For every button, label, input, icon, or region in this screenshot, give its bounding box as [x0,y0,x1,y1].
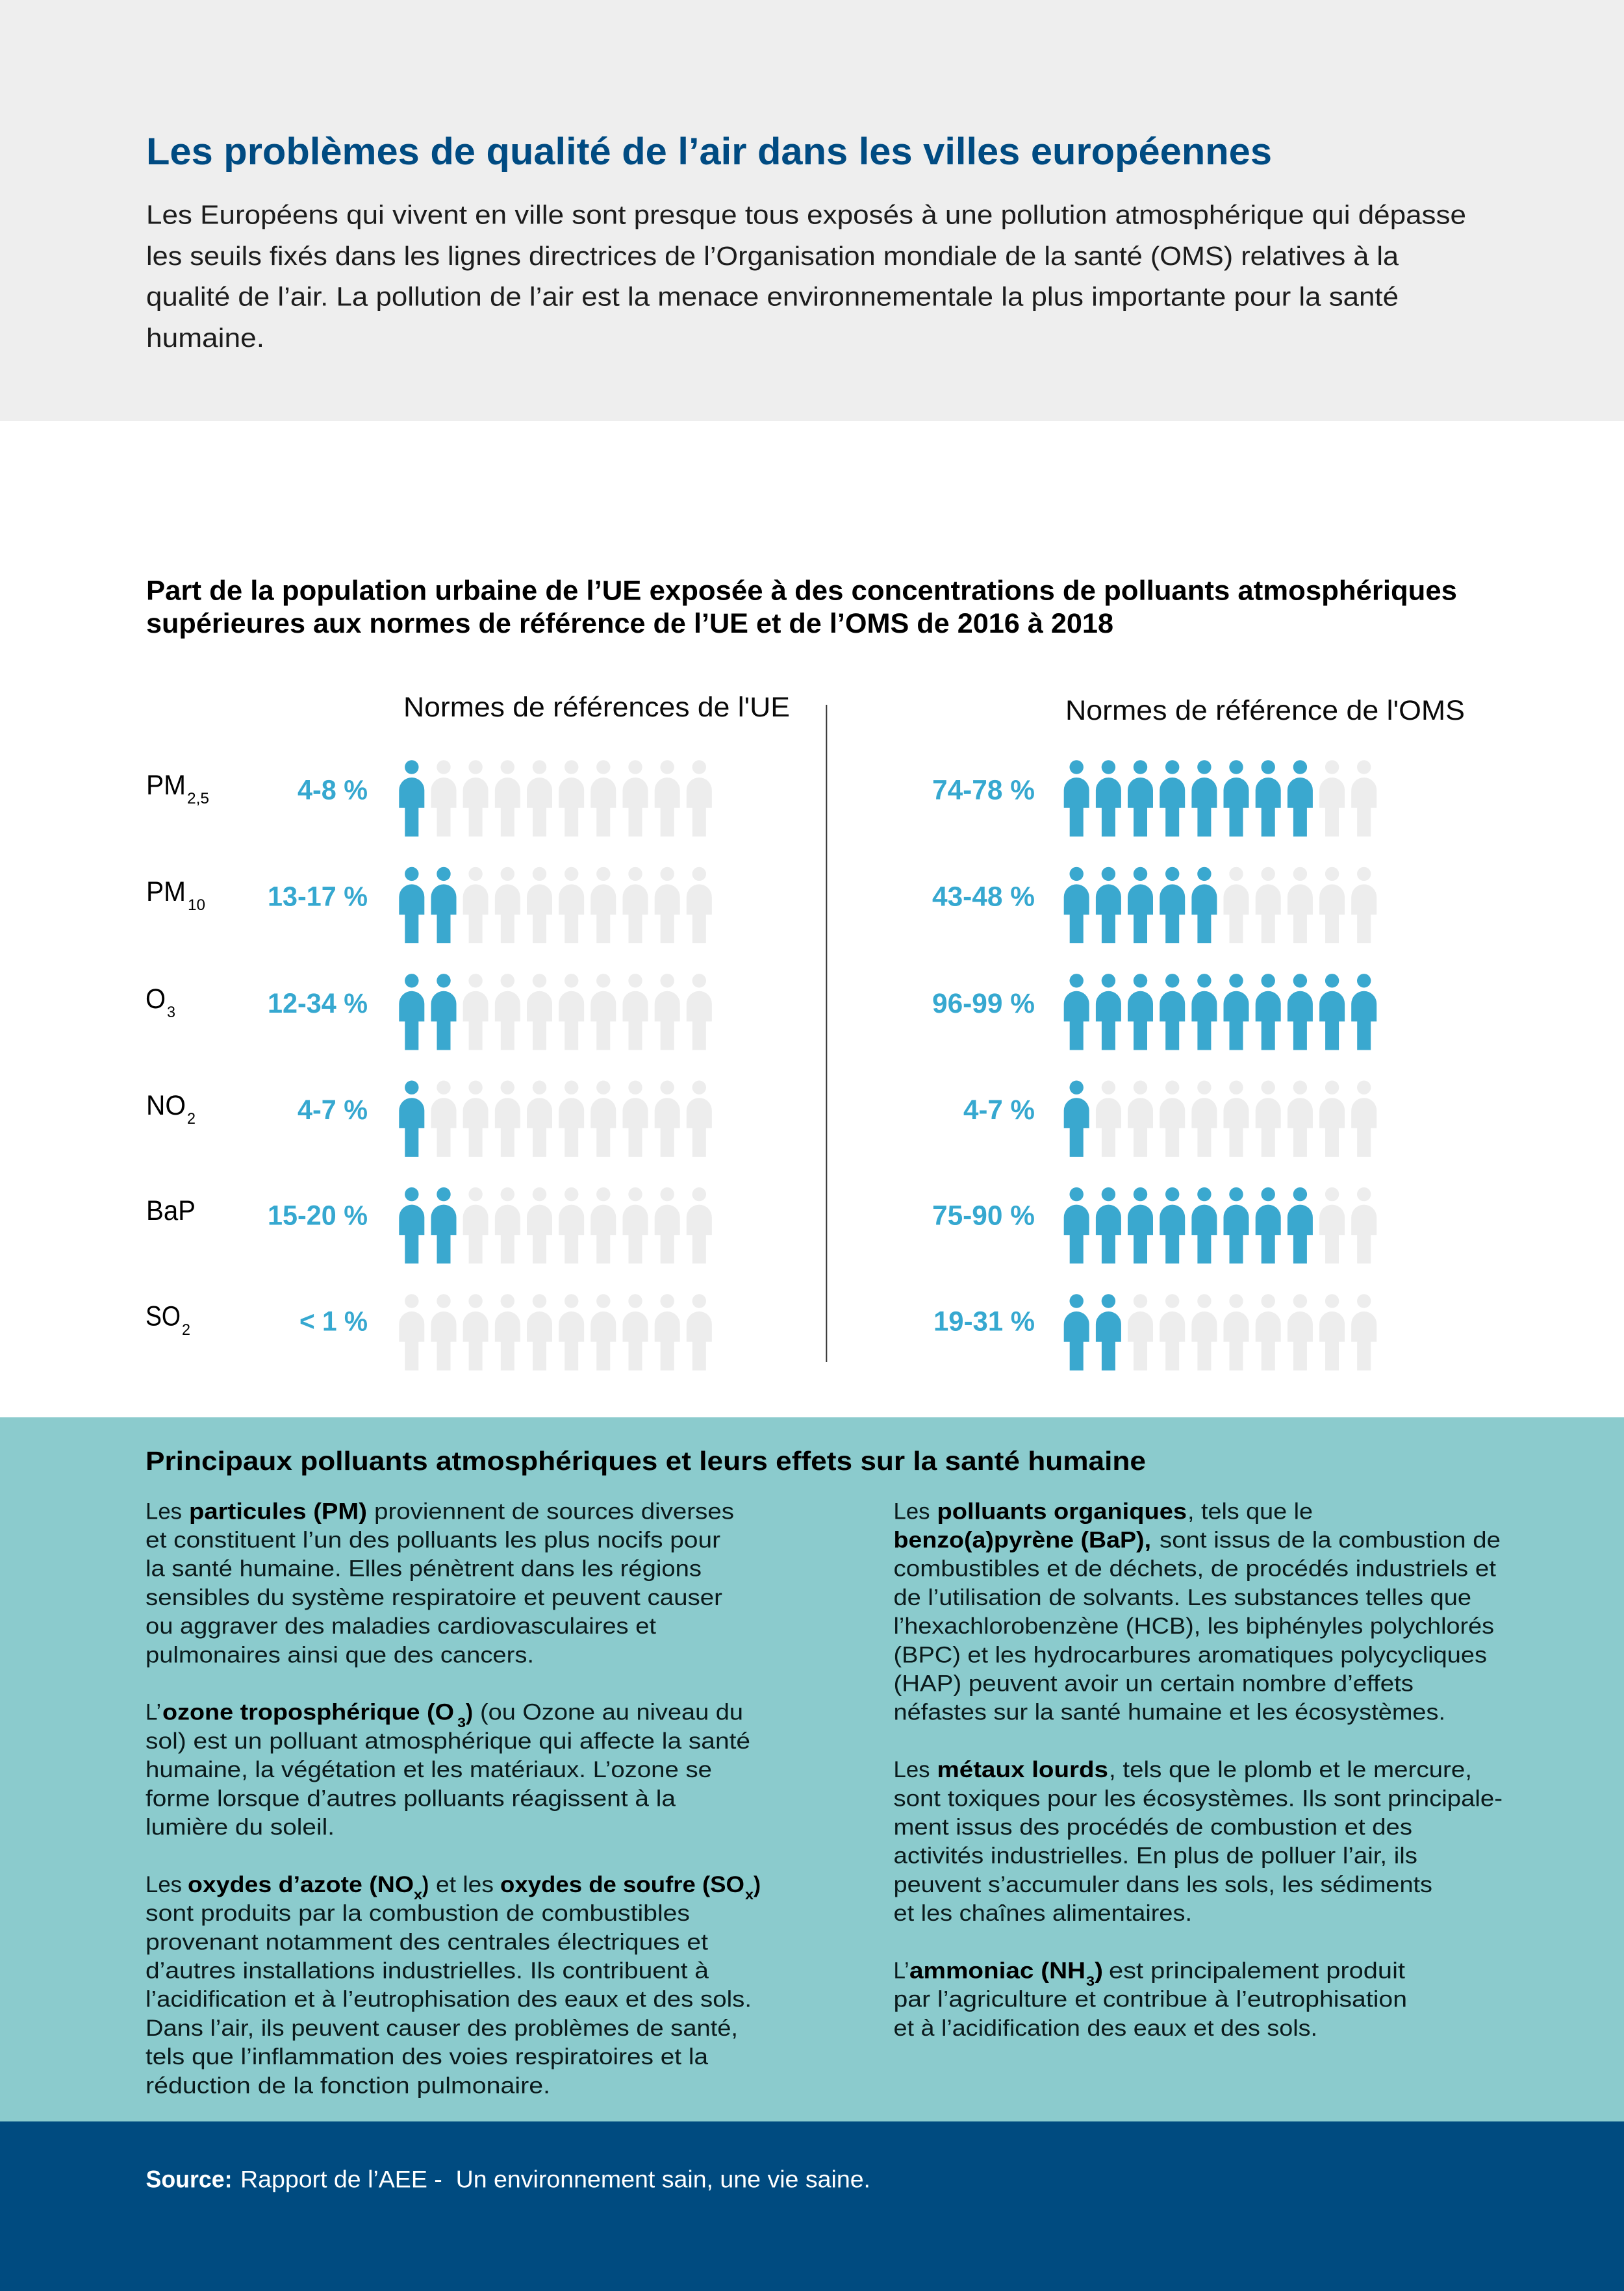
text: organic pollutants: (BPC) et les hydrocarbures aromatiques polycycliques [894,1642,1487,1667]
column heading: WHO: Normes de référence de l'OMS [1065,695,1465,726]
text: organic pollutants: , tels que le [1187,1499,1313,1524]
text: organic pollutants: de l’utilisation de solvants. Les substances telles que [894,1585,1471,1610]
source text: Source: [146,2166,233,2193]
text: nitrogen and sulphur oxides: sont produits par la combustion de combustibles [146,1901,690,1926]
column heading: EU: Normes de références de l'UE [403,692,790,723]
pictogram: WHO O3 [1064,974,1377,1050]
percentages: WHO: 4-7 % [963,1095,1035,1126]
text: ammonia: ) [1095,1958,1103,1984]
percentages: EU: 4-8 % [298,775,368,806]
intro text: humaine. [146,323,264,353]
text: nitrogen and sulphur oxides: oxydes de soufre (SO [500,1872,744,1897]
chart heading: supérieures aux normes de référence de l’UE et de l’OMS de 2016 à 2018 [146,608,1113,639]
percentages: WHO: 75-90 % [932,1200,1035,1232]
text: ozone: sol) est un polluant atmosphérique qui affecte la santé [146,1728,750,1754]
text: nitrogen and sulphur oxides: oxydes d’azote (NO [188,1872,414,1897]
text: heavy metals: métaux lourds [937,1757,1108,1782]
text: heavy metals: activités industrielles. En plus de polluer l’air, ils [894,1843,1417,1869]
text: ammonia: L’ [894,1958,909,1984]
text: ammonia [894,1958,1407,2041]
text: nitrogen and sulphur oxides: provenant notamment des centrales électriques et [146,1929,708,1955]
row labels: pollutants: PM [146,770,186,801]
heading: main pollutants: Principaux polluants atmosphériques et leurs effets sur la santé humaine [146,1446,1146,1476]
text: organic pollutants: sont issus de la combustion de [1160,1528,1501,1552]
text: heavy metals: peuvent s’accumuler dans les sols, les sédiments [894,1872,1432,1897]
intro text: qualité de l’air. La pollution de l’air est la menace environnementale la plus importante pour la santé [146,282,1399,312]
title: Les problèmes de qualité de l’air dans les villes européennes [146,131,1272,173]
text: ozone: 3 [457,1715,466,1730]
text: ammonia: par l’agriculture et contribue à l’eutrophisation [894,1987,1407,2012]
text: organic pollutants: polluants organiques [937,1499,1187,1524]
source text: Rapport de l’AEE - Un environnement sain, une vie saine. [240,2166,870,2193]
row labels: pollutants: 3 [167,1004,175,1021]
percentages: EU: 15-20 % [268,1200,368,1232]
text: nitrogen and sulphur oxides: réduction de la fonction pulmonaire. [146,2073,550,2098]
percentages: EU [268,775,368,1337]
row labels: pollutants: SO [146,1301,181,1332]
text: heavy metals: et les chaînes alimentaires. [894,1901,1192,1926]
pictogram: WHO NO2 [1064,1081,1377,1157]
row labels: pollutants [146,770,209,1339]
row labels: pollutants: O [146,983,166,1015]
text: particulate matter: la santé humaine. Elles pénètrent dans les régions [146,1556,702,1582]
text: ozone: ozone troposphérique (O [162,1700,454,1725]
text: organic pollutants: combustibles et de déchets, de procédés industriels et [894,1556,1496,1582]
row labels: pollutants: NO [146,1090,186,1121]
text: organic pollutants: (HAP) peuvent avoir un certain nombre d’effets [894,1671,1414,1697]
pictogram: WHO PM2,5 [1064,760,1377,837]
text: nitrogen and sulphur oxides: Dans l’air, ils peuvent causer des problèmes de santé, [146,2016,738,2041]
text: nitrogen and sulphur oxides [146,1872,761,2098]
percentages: EU: 12-34 % [268,988,368,1019]
text: particulate matter: sensibles du système respiratoire et peuvent causer [146,1585,722,1610]
pictogram: WHO SO2 [1064,1294,1377,1371]
text: nitrogen and sulphur oxides: Les [146,1872,182,1897]
pictogram: EU BaP [399,1187,712,1263]
text: particulate matter: pulmonaires ainsi que des cancers. [146,1642,534,1667]
text: particulate matter: ou aggraver des maladies cardiovasculaires et [146,1614,656,1639]
panel: source footer [0,2121,1624,2291]
panel: pollutants and health effects [0,1417,1624,2121]
text: ozone [146,1700,750,1840]
text: organic pollutants: néfastes sur la santé humaine et les écosystèmes. [894,1700,1445,1725]
chart heading [146,575,1457,639]
text: ammonia: ammoniac (NH [909,1958,1085,1984]
row labels: pollutants: PM [146,876,186,907]
text: particulate matter: et constituent l’un des polluants les plus nocifs pour [146,1528,720,1552]
row labels: pollutants: 2 [187,1110,196,1128]
text: heavy metals [894,1757,1503,1926]
text: nitrogen and sulphur oxides: ) [422,1872,429,1897]
percentages: WHO: 43-48 % [932,881,1035,913]
text: ammonia: et à l’acidification des eaux et des sols. [894,2016,1317,2041]
text: nitrogen and sulphur oxides: x [414,1888,422,1903]
row labels: pollutants: BaP [146,1195,196,1226]
text: ammonia: 3 [1086,1974,1095,1989]
intro text: Les Européens qui vivent en ville sont presque tous exposés à une pollution atmosphérique qui dépasse [146,200,1466,230]
percentages: WHO: 19-31 % [933,1306,1035,1337]
text: nitrogen and sulphur oxides: x [745,1888,754,1903]
text: ammonia: est principalement produit [1109,1958,1405,1984]
text: nitrogen and sulphur oxides: tels que l’inflammation des voies respiratoires et la [146,2044,709,2069]
text: particulate matter [146,1499,734,1667]
text: ozone: ) [466,1700,473,1725]
text: organic pollutants: benzo(a)pyrène (BaP), [894,1528,1151,1552]
text: nitrogen and sulphur oxides: ) [754,1872,761,1897]
intro text: les seuils fixés dans les lignes directrices de l’Organisation mondiale de la santé (OMS) relatives à la [146,241,1399,271]
text: particulate matter: proviennent de sources diverses [374,1499,734,1524]
percentages: EU: 4-7 % [298,1095,368,1126]
pictogram: EU PM2,5 [399,760,712,837]
row labels: pollutants: 10 [188,896,205,914]
percentages: EU: < 1 % [299,1306,368,1337]
panel: intro [0,0,1624,421]
text: particulate matter: particules (PM) [189,1499,367,1524]
text: heavy metals: sont toxiques pour les écosystèmes. Ils sont principale- [894,1786,1503,1811]
percentages: EU: 13-17 % [268,881,368,913]
text: heavy metals: Les [894,1757,930,1782]
text: nitrogen and sulphur oxides: l’acidification et à l’eutrophisation des eaux et des sols. [146,1987,752,2012]
text: ozone: lumière du soleil. [146,1815,335,1840]
pictogram: EU O3 [399,974,712,1050]
chart heading: Part de la population urbaine de l’UE exposée à des concentrations de polluants atmosphériques [146,575,1457,606]
pictogram: EU SO2 [399,1294,712,1371]
percentages: WHO: 96-99 % [932,988,1035,1019]
pictogram: EU NO2 [399,1081,712,1157]
text: organic pollutants [894,1499,1501,1725]
text: organic pollutants: Les [894,1499,930,1524]
pictogram: WHO PM10 [1064,867,1377,943]
text: ozone: (ou Ozone au niveau du [480,1700,743,1725]
text: organic pollutants: l’hexachlorobenzène (HCB), les biphényles polychlorés [894,1614,1494,1639]
text: heavy metals: ment issus des procédés de combustion et des [894,1815,1412,1840]
text: heavy metals: , tels que le plomb et le mercure, [1109,1757,1472,1782]
text: particulate matter: Les [146,1499,182,1524]
row labels: pollutants: 2,5 [187,790,209,807]
row labels: pollutants: 2 [182,1321,190,1339]
pictogram: EU PM10 [399,867,712,943]
text: ozone: humaine, la végétation et les matériaux. L’ozone se [146,1757,712,1782]
text: nitrogen and sulphur oxides: et les [436,1872,494,1897]
intro text [146,200,1466,353]
percentages: WHO: 74-78 % [932,775,1035,806]
text: ozone: L’ [146,1700,161,1725]
percentages: WHO [932,775,1035,1337]
text: ozone: forme lorsque d’autres polluants réagissent à la [146,1786,676,1811]
pictogram: WHO BaP [1064,1187,1377,1263]
text: nitrogen and sulphur oxides: d’autres installations industrielles. Ils contribuent à [146,1958,709,1984]
